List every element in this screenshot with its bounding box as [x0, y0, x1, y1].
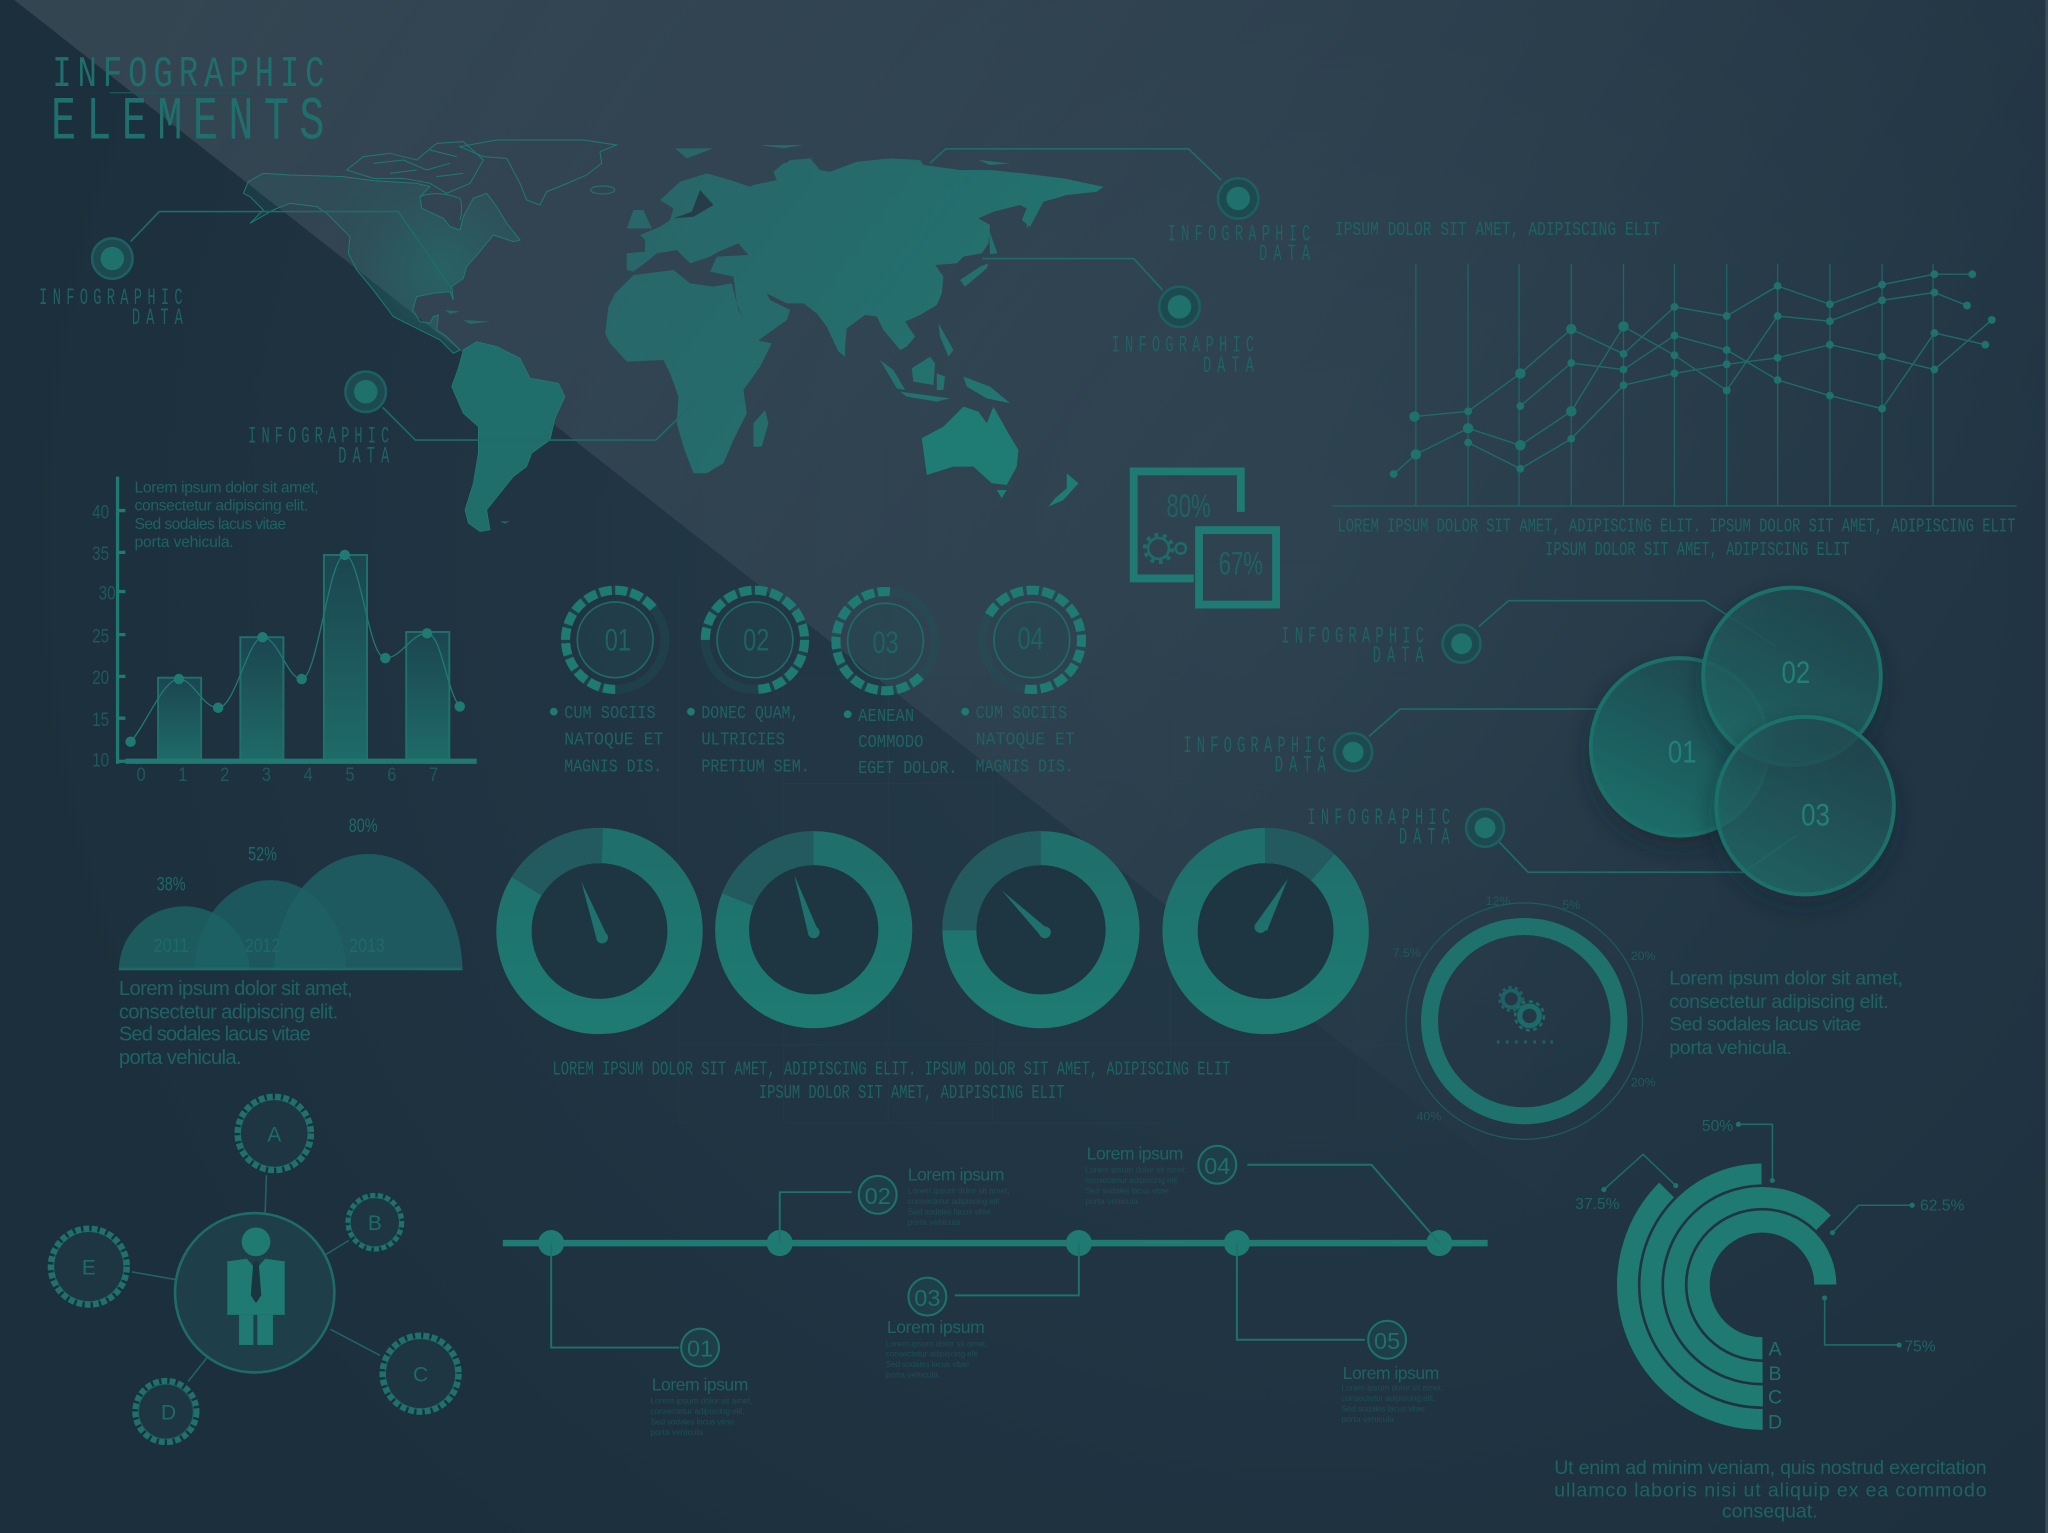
timeline text 04: consectetur adipiscing elit. [1085, 1175, 1179, 1185]
dial text lists: COMMODO [858, 733, 923, 753]
callout labels: INFOGRAPHIC [1168, 221, 1310, 248]
radial bar chart [1575, 1118, 1964, 1434]
iceland outline [591, 186, 615, 194]
ring chart text [1669, 968, 1903, 1059]
dome area chart: 2011 [153, 935, 189, 957]
numbered dial 01 [566, 590, 665, 689]
venn diagram [1591, 588, 1894, 894]
dial text lists: NATOQUE ET [976, 730, 1075, 750]
timeline text 03: Lorem ipsum [887, 1317, 985, 1337]
radial chart text [1554, 1457, 1987, 1522]
dome area chart: 2012 [245, 935, 280, 957]
title: INFOGRAPHIC [52, 51, 325, 100]
callout labels: DATA [1399, 824, 1450, 851]
numbered dial 02: 02 [743, 622, 769, 657]
timeline text 02: Lorem ipsum [908, 1164, 1004, 1184]
bar chart: 35 [92, 543, 109, 565]
line chart: IPSUM DOLOR SIT AMET, ADIPISCING ELIT [1335, 219, 1660, 241]
bar chart: 7 [429, 764, 438, 786]
numbered dial 03: 03 [872, 625, 899, 660]
people network: A [267, 1123, 281, 1146]
ring chart with gears: 7.5% [1393, 946, 1421, 960]
percent frames 80% 67% [1134, 471, 1276, 605]
world map: eurasia, africa, australia [605, 145, 1103, 507]
line chart: IPSUM DOLOR SIT AMET, ADIPISCING ELIT [1545, 539, 1850, 561]
venn diagram: 01 [1668, 735, 1697, 770]
people network: C [413, 1364, 428, 1387]
callout node 7 [1466, 809, 1504, 847]
timeline text 04: Lorem ipsum dolor sit amet, [1085, 1165, 1187, 1175]
gauges caption [552, 1059, 1231, 1104]
radial bar chart: B [1768, 1363, 1782, 1385]
gauge 3 [959, 848, 1123, 1011]
people network: B [368, 1212, 382, 1235]
dome area chart: 2013 [349, 935, 385, 957]
numbered dial 04: 04 [1017, 621, 1044, 656]
numbered dial 04 [964, 572, 1100, 708]
callout node 3 [1218, 178, 1258, 219]
ring chart text: porta vehicula. [1669, 1037, 1792, 1059]
africa [605, 270, 772, 473]
timeline text 02: Sed sodales lacus vitae [908, 1206, 992, 1216]
timeline [503, 1146, 1488, 1367]
callout labels: INFOGRAPHIC [1183, 733, 1326, 759]
radial bar chart: A [1768, 1338, 1782, 1360]
ring chart with gears: 5% [1562, 898, 1580, 912]
numbered dial 01: 01 [605, 622, 631, 657]
callout labels: DATA [132, 304, 183, 331]
callout labels: DATA [338, 443, 390, 470]
callout labels: INFOGRAPHIC [1112, 332, 1254, 359]
radial bar chart: 75% [1904, 1338, 1936, 1355]
ring chart with gears: 20% [1631, 1075, 1656, 1089]
dome area chart: 80% [349, 815, 377, 837]
callout labels: DATA [1203, 353, 1254, 379]
callout labels [39, 221, 1450, 851]
north america [243, 173, 520, 353]
bar chart: consectetur adipiscing elit. [135, 498, 308, 515]
radial bar chart: 50% [1702, 1118, 1733, 1135]
dial text lists: NATOQUE ET [564, 730, 664, 750]
radial bar chart: C [1768, 1387, 1782, 1409]
timeline text 04 [1085, 1144, 1187, 1206]
timeline text 03: Sed sodales lacus vitae [886, 1359, 969, 1369]
dome chart text: consectetur adipiscing elit. [119, 1002, 338, 1024]
callout node 1 [92, 238, 133, 279]
ring chart with gears: 40% [1416, 1109, 1441, 1123]
bar chart: 6 [387, 764, 396, 786]
timeline text 05: consectetur adipiscing elit. [1341, 1393, 1435, 1403]
callout labels: INFOGRAPHIC [1307, 805, 1450, 831]
timeline text 04: porta vehicula. [1085, 1196, 1140, 1206]
timeline text 01: porta vehicula. [650, 1427, 705, 1437]
dial text lists: AENEAN [858, 707, 914, 727]
dial text lists: ULTRICIES [701, 730, 785, 750]
radial bar chart: 62.5% [1920, 1197, 1964, 1214]
timeline text 05: Lorem ipsum dolor sit amet, [1341, 1383, 1443, 1393]
callout node 4 [1159, 287, 1200, 327]
bar chart: 30 [99, 582, 116, 604]
australia [922, 407, 1018, 498]
dome chart text [119, 978, 353, 1069]
greenland outline [460, 140, 617, 205]
ring chart with gears [1393, 894, 1656, 1139]
gauge 1 [482, 813, 717, 1049]
timeline text 05 [1341, 1363, 1443, 1424]
radial bar chart: 37.5% [1575, 1196, 1620, 1213]
timeline text 02 [908, 1164, 1010, 1227]
timeline text 04: Lorem ipsum [1087, 1144, 1183, 1164]
callout node 2 [345, 371, 386, 412]
timeline text 05: Lorem ipsum [1343, 1363, 1439, 1383]
gauge 2 [707, 823, 920, 1036]
dome area chart: 52% [248, 844, 277, 866]
bar chart: 3 [262, 764, 271, 786]
gauges caption: LOREM IPSUM DOLOR SIT AMET, ADIPISCING ELIT. IPSUM DOLOR SIT AMET, ADIPISCING ELIT [552, 1059, 1231, 1081]
ring chart text: Sed sodales lacus vitae [1669, 1013, 1861, 1035]
numbered dial 03 [815, 571, 956, 711]
venn diagram: 03 [1801, 797, 1830, 832]
bar chart: 2 [220, 764, 229, 786]
timeline: 03 [914, 1285, 940, 1311]
radial chart text: Ut enim ad minim veniam, quis nostrud exercitation [1554, 1457, 1987, 1479]
callout labels: DATA [1275, 752, 1326, 779]
timeline text 04: Sed sodales lacus vitae [1085, 1185, 1169, 1195]
line chart [1332, 219, 2017, 561]
radial chart text: ullamco laboris nisi ut aliquip ex ea commodo [1554, 1479, 1987, 1501]
new zealand [1048, 473, 1078, 507]
timeline text 05: Sed sodales lacus vitae [1341, 1404, 1425, 1414]
caribbean [445, 310, 510, 524]
timeline text 02: Lorem ipsum dolor sit amet, [908, 1185, 1010, 1195]
bar chart: 4 [304, 764, 313, 786]
timeline text 03 [886, 1317, 987, 1380]
callout labels: INFOGRAPHIC [39, 285, 183, 312]
title [51, 51, 325, 157]
venn diagram: 02 [1782, 655, 1810, 690]
ring chart with gears: 20% [1631, 949, 1656, 963]
eurasia [627, 158, 1103, 357]
callout labels: DATA [1373, 643, 1424, 669]
bar chart: 15 [92, 709, 109, 731]
timeline text 02: porta vehicula. [908, 1217, 963, 1227]
icon: businessman [227, 1227, 285, 1345]
percent frames 80% 67%: 80% [1166, 487, 1211, 524]
bar chart: 25 [92, 625, 109, 647]
timeline text 01: Lorem ipsum dolor sit amet, [650, 1396, 752, 1406]
timeline text 01: consectetur adipiscing elit. [650, 1406, 744, 1416]
timeline text 03: consectetur adipiscing elit. [886, 1349, 980, 1359]
arctic islands outline [347, 142, 483, 220]
timeline text 01 [650, 1375, 752, 1437]
dial text lists [550, 704, 1075, 779]
dial text lists: MAGNIS DIS. [564, 758, 662, 778]
dome chart text: Sed sodales lacus vitae [119, 1024, 311, 1046]
ring chart with gears: 12% [1486, 894, 1511, 908]
bar chart: Lorem ipsum dolor sit amet, [135, 479, 319, 496]
title: ELEMENTS [51, 87, 324, 157]
bar chart: 20 [92, 667, 109, 689]
islands [627, 145, 1042, 447]
callout labels: INFOGRAPHIC [1281, 623, 1424, 650]
timeline text 03: porta vehicula. [886, 1370, 940, 1380]
timeline: 02 [865, 1183, 891, 1209]
people network: D [161, 1401, 176, 1424]
dial text lists: MAGNIS DIS. [976, 758, 1074, 778]
bar chart: Sed sodales lacus vitae [135, 516, 286, 533]
bar chart: porta vehicula. [135, 534, 234, 551]
bar chart: 0 [136, 764, 146, 786]
timeline text 01: Sed sodales lacus vitae [650, 1417, 734, 1427]
bar chart: 40 [92, 501, 109, 523]
callout labels: INFOGRAPHIC [248, 423, 389, 450]
timeline: 04 [1204, 1153, 1230, 1179]
people network: E [82, 1256, 96, 1279]
timeline: 01 [687, 1336, 713, 1362]
dome chart text: Lorem ipsum dolor sit amet, [119, 978, 353, 1000]
gauge 4 [1180, 846, 1351, 1017]
percent frames 80% 67%: 67% [1219, 545, 1263, 582]
radial bar chart: D [1768, 1412, 1782, 1434]
bar chart: 1 [178, 764, 187, 786]
callout labels: DATA [1259, 240, 1311, 267]
gauges caption: IPSUM DOLOR SIT AMET, ADIPISCING ELIT [759, 1082, 1065, 1104]
ring chart text: Lorem ipsum dolor sit amet, [1669, 968, 1903, 990]
callout lines [131, 149, 1796, 872]
dial text lists: PRETIUM SEM. [701, 758, 810, 778]
timeline text 05: porta vehicula. [1341, 1414, 1396, 1424]
baltic sea cutout [673, 190, 713, 218]
radial chart text: consequat. [1722, 1500, 1818, 1522]
people network [51, 1097, 458, 1442]
timeline text 03: Lorem ipsum dolor sit amet, [886, 1338, 987, 1348]
bar chart: 10 [92, 750, 109, 771]
callout node 5 [1443, 625, 1480, 663]
dial text lists: DONEC QUAM, [701, 704, 799, 724]
dial text lists: CUM SOCIIS [976, 704, 1067, 724]
dial text lists: CUM SOCIIS [564, 704, 656, 724]
callout node 6 [1334, 733, 1372, 771]
world map: americas [243, 140, 617, 532]
bar chart: 5 [345, 764, 355, 786]
dial text lists: EGET DOLOR. [858, 759, 957, 779]
dome area chart [119, 815, 462, 970]
timeline: 05 [1374, 1328, 1400, 1354]
timeline text 02: consectetur adipiscing elit. [908, 1196, 1002, 1206]
numbered dial 02 [705, 590, 805, 689]
bar chart [92, 477, 477, 786]
dome area chart: 38% [157, 874, 185, 896]
timeline text 01: Lorem ipsum [652, 1375, 748, 1395]
south america [452, 342, 565, 532]
dome chart text: porta vehicula. [119, 1047, 242, 1069]
ring chart text: consectetur adipiscing elit. [1669, 991, 1889, 1013]
